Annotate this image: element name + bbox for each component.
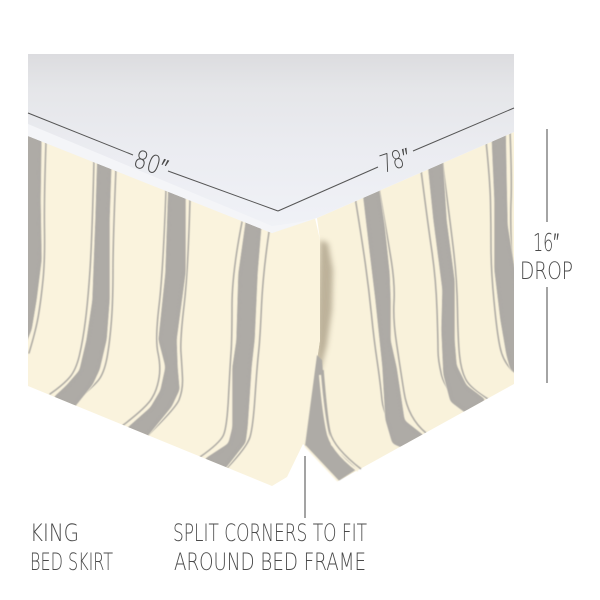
callout line: split corner <box>304 456 306 518</box>
label: 16 inches: 16″ <box>533 228 559 257</box>
text: product name: BED SKIRT <box>30 548 113 576</box>
label: 80 inches: 80″ <box>130 144 172 183</box>
corner back stripe under the flap <box>305 355 361 481</box>
bed top sheet <box>28 54 514 233</box>
dimension: 16 inch drop <box>520 129 573 383</box>
dimension: 78 inch length <box>278 108 514 211</box>
panel: right skirt side <box>303 126 520 481</box>
label: 78 inches: 78″ <box>376 142 414 179</box>
text: product name <box>30 519 113 576</box>
thin lines: right side <box>355 131 513 443</box>
dimension: 80 inch width <box>28 113 278 211</box>
thin lines: left side <box>29 142 269 468</box>
text: split corners note: SPLIT CORNERS TO FIT <box>173 519 367 547</box>
text: split corners note <box>173 519 367 576</box>
hem of sheet <box>28 124 317 233</box>
text: split corners note: AROUND BED FRAME <box>174 548 366 576</box>
panel: left skirt side with corner flap <box>20 125 320 486</box>
bands: right side <box>362 126 520 450</box>
bands: left side <box>20 125 262 470</box>
text: product name: KING <box>30 519 79 547</box>
fold shadow <box>316 240 333 372</box>
label: DROP: DROP <box>520 257 573 285</box>
